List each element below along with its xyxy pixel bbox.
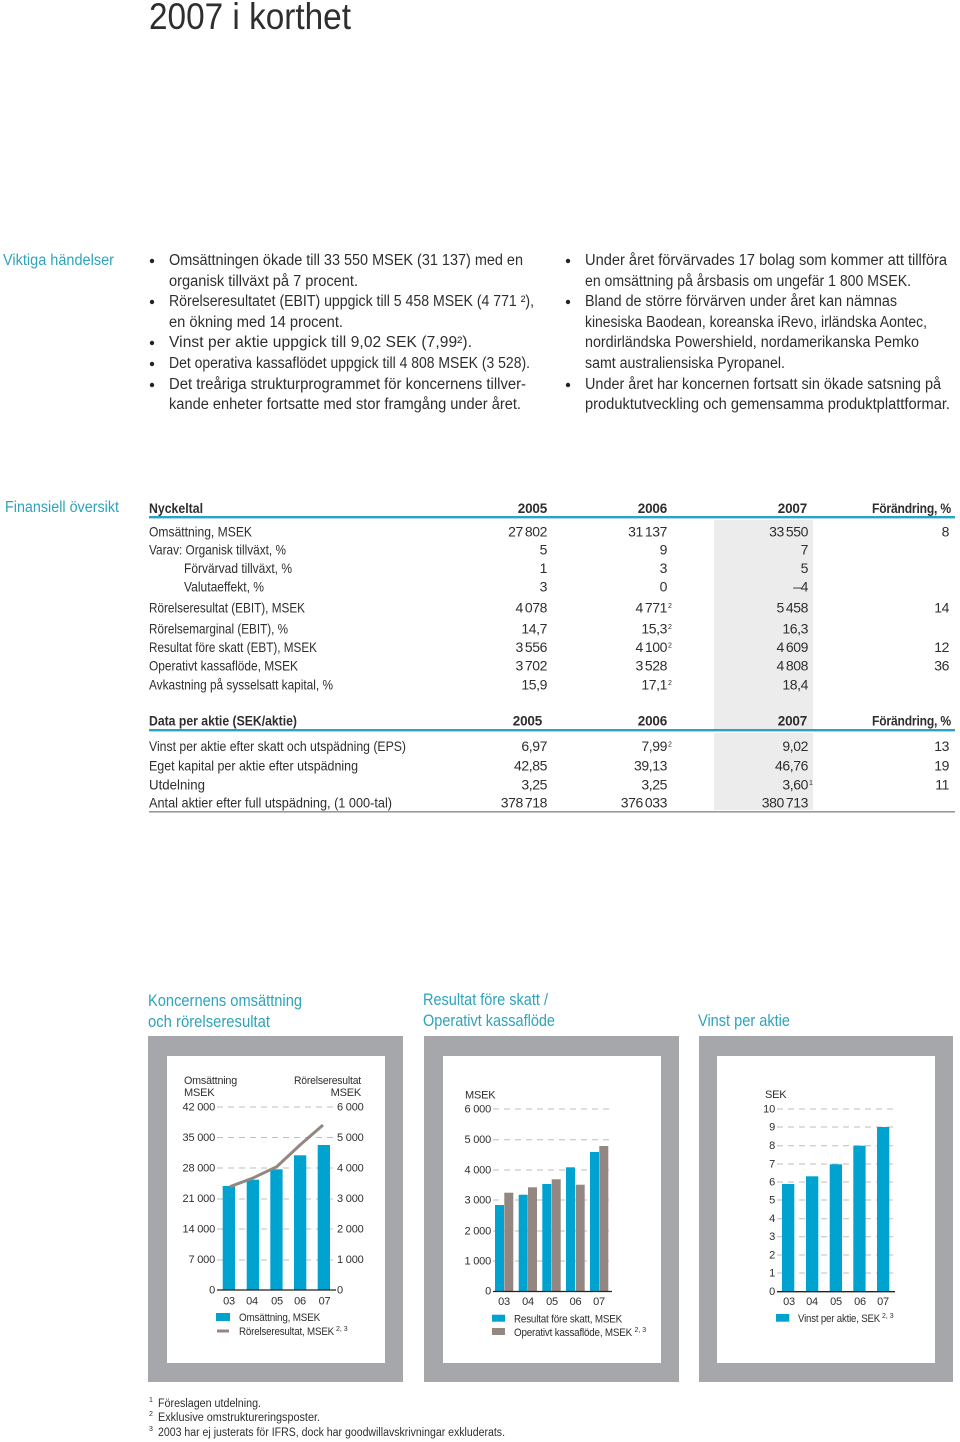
values: 2005: 14,7: [521, 620, 548, 636]
x axis labels: 05: [830, 1296, 842, 1308]
x axis labels: 07: [877, 1296, 889, 1308]
values: per share: 3,60: [782, 776, 809, 792]
left axis labels: 14 000: [183, 1224, 215, 1236]
row labels: per share data: Utdelning: [149, 776, 205, 792]
text block: events right column: nordirländska Powershield, nordamerikanska Pemko: [585, 334, 919, 351]
row labels: key figures: Varav: Organisk tillväxt, %: [149, 542, 286, 558]
section heading: Viktiga händelser: Viktiga händelser: [3, 252, 114, 269]
row labels: key figures: Valutaeffekt, %: [184, 578, 264, 594]
chart heading: Koncernens omsättning och rörelseresultat: [148, 992, 302, 1031]
right axis labels: 3 000: [337, 1193, 364, 1205]
values: 2007: [769, 524, 809, 692]
table header: Data per aktie: 2006: [638, 714, 668, 728]
text block: events right column: [566, 252, 950, 413]
footnotes: 2: [149, 1411, 153, 1418]
text block: events right column: Bland de större förvärven under året kan nämnas: [585, 293, 897, 310]
text block: events right column: produktutveckling och gemensamma produktplattformar.: [585, 396, 950, 413]
text block: events right column: Under året har koncernen fortsatt sin ökade satsning på: [585, 376, 941, 393]
values: 2005: 5: [540, 542, 548, 558]
table header: Data per aktie: Data per aktie (SEK/aktie): [149, 714, 297, 728]
table header: Data per aktie: 2005: [513, 714, 543, 728]
values: 2006: 4 771: [635, 600, 668, 616]
axis title: MSEK: [465, 1090, 496, 1102]
x axis labels: [783, 1296, 889, 1308]
values: 2007: 7: [801, 542, 809, 558]
values: 2006: [628, 524, 672, 692]
y axis labels: 3: [769, 1231, 775, 1243]
values: per share: 3,25: [521, 776, 548, 792]
table header: Nyckeltal: 2006: [638, 501, 668, 516]
table header: Nyckeltal: 2005: [518, 501, 548, 516]
row labels: key figures: Rörelseresultat (EBIT), MSEK: [149, 600, 306, 616]
right axis labels: 1 000: [337, 1254, 364, 1266]
row labels: key figures: Operativt kassaflöde, MSEK: [149, 658, 299, 674]
row labels: key figures: [149, 524, 333, 692]
y axis labels: 1 000: [464, 1256, 491, 1268]
left axis labels: 7 000: [188, 1254, 215, 1266]
left axis labels: 28 000: [183, 1162, 215, 1174]
table header: Nyckeltal: [149, 501, 955, 518]
text block: events left column: [150, 252, 534, 413]
y axis labels: [464, 1104, 491, 1298]
y axis labels: 1: [769, 1268, 775, 1280]
table: financial overview: [149, 501, 955, 813]
row labels: per share data: Eget kapital per aktie efter utspädning: [149, 758, 358, 774]
values: per share: 6,97: [521, 738, 548, 754]
panel: resultat och kassaflöde chart: [424, 1036, 679, 1382]
y axis labels: [763, 1104, 775, 1298]
y axis labels: 6 000: [464, 1104, 491, 1116]
values: 2006: 3 528: [635, 658, 668, 674]
row labels: per share data: Vinst per aktie efter skatt och utspädning (EPS): [149, 738, 406, 754]
x axis labels: 07: [319, 1296, 330, 1308]
left axis labels: 0: [209, 1284, 215, 1296]
footnotes: [149, 1397, 505, 1439]
y axis labels: 10: [763, 1104, 775, 1116]
x axis labels: 06: [294, 1296, 306, 1308]
row labels: key figures: Resultat före skatt (EBT), MSEK: [149, 639, 318, 655]
values: per share: 2: [668, 742, 672, 748]
values: 2007: 5 458: [776, 600, 809, 616]
values: 2006: 2: [668, 603, 672, 610]
legend: Omsättning, MSEK: [239, 1312, 321, 1324]
panel: omsättning chart: [148, 1036, 403, 1382]
values: 2007: 18,4: [782, 676, 809, 692]
values: per share: 1: [809, 780, 813, 787]
panel: vinst per aktie chart: [699, 1036, 953, 1382]
table header: Nyckeltal: 2007: [778, 501, 807, 516]
line: rörelseresultat: [230, 1125, 323, 1187]
values: 2005: 27 802: [508, 524, 548, 540]
values: per share: 13: [934, 738, 950, 754]
table header: Nyckeltal: Förändring, %: [872, 501, 951, 516]
footnotes: 1: [149, 1397, 153, 1404]
values: 2005: 3 556: [515, 639, 548, 655]
legend: Resultat före skatt, MSEK: [514, 1314, 623, 1326]
right axis labels: 2 000: [337, 1224, 364, 1236]
values: per share: 376 033: [621, 794, 668, 810]
legend: [216, 1312, 348, 1338]
footnotes: Exklusive omstruktureringsposter.: [158, 1412, 320, 1424]
right axis labels: [337, 1102, 364, 1296]
table header: Data per aktie: [149, 714, 955, 731]
values: per share: 9,02: [782, 738, 809, 754]
values: 2006: 2: [668, 642, 672, 650]
values: 2005: [508, 524, 548, 692]
legend: 2, 3: [336, 1326, 348, 1333]
text block: events right column: en omsättning på årsbasis om ungefär 1 800 MSEK.: [585, 273, 911, 290]
text block: events left column: Omsättningen ökade till 33 550 MSEK (31 137) med en: [169, 252, 523, 269]
x axis labels: 03: [783, 1296, 795, 1308]
row labels: key figures: Förvärvad tillväxt, %: [184, 560, 292, 576]
right axis labels: 6 000: [337, 1102, 364, 1114]
x axis labels: [223, 1296, 330, 1308]
x axis labels: 03: [498, 1296, 510, 1308]
y axis labels: 6: [769, 1176, 775, 1188]
row labels: key figures: Rörelsemarginal (EBIT), %: [149, 620, 288, 636]
axis titles: [184, 1075, 362, 1099]
values: change percent: [934, 524, 950, 674]
left axis labels: 21 000: [183, 1193, 215, 1205]
values: per share: 380 713: [762, 794, 809, 810]
x axis labels: 04: [522, 1296, 534, 1308]
values: per share: 39,13: [634, 758, 668, 774]
values: per share: 19: [934, 758, 950, 774]
bars: omsättning: [223, 1145, 330, 1290]
values: 2006: 15,3: [641, 620, 668, 636]
values: per share: 3,25: [641, 776, 668, 792]
legend: [492, 1314, 646, 1339]
text block: events left column: kande enheter fortsatte med stor framgång under året.: [169, 396, 521, 413]
left axis labels: 42 000: [183, 1102, 215, 1114]
left axis labels: [183, 1102, 215, 1296]
section heading: Finansiell översikt: Finansiell översikt: [5, 499, 120, 516]
text block: events left column: Rörelseresultatet (EBIT) uppgick till 5 458 MSEK (4 771 ²),: [169, 293, 534, 310]
footnotes: 3: [149, 1426, 153, 1433]
y axis labels: 4 000: [464, 1164, 491, 1176]
legend: Operativt kassaflöde, MSEK: [514, 1327, 633, 1339]
values: 2005: 4 078: [515, 600, 548, 616]
values: change percent: 36: [934, 658, 950, 674]
text block: events right column: kinesiska Baodean, koreanska iRevo, irländska Aontec,: [585, 314, 927, 331]
x axis labels: [498, 1296, 605, 1308]
x axis labels: 07: [593, 1296, 605, 1308]
text block: events left column: en ökning med 14 procent.: [169, 314, 343, 331]
values: 2005: 15,9: [521, 676, 548, 692]
values: 2006: 0: [660, 578, 668, 594]
x axis labels: 06: [570, 1296, 581, 1308]
row labels: key figures: Omsättning, MSEK: [149, 524, 253, 540]
values: 2006: 4 100: [635, 639, 668, 655]
text block: events left column: Det operativa kassaflödet uppgick till 4 808 MSEK (3 528).: [169, 355, 530, 372]
footnotes: Föreslagen utdelning.: [158, 1398, 261, 1410]
values: 2007: 4 609: [776, 639, 809, 655]
values: 2007: 5: [801, 560, 809, 576]
axis titles: Rörelseresultat: [294, 1075, 361, 1087]
values: 2007: 16,3: [782, 620, 809, 636]
legend: Vinst per aktie, SEK: [798, 1313, 881, 1325]
right axis labels: 5 000: [337, 1132, 364, 1144]
table header: Nyckeltal: Nyckeltal: [149, 501, 203, 516]
axis title: SEK: [765, 1089, 787, 1101]
x axis labels: 03: [223, 1296, 235, 1308]
bars: resultat före skatt: [495, 1152, 599, 1291]
values: 2006: 2: [668, 680, 672, 687]
table header: Data per aktie: 2007: [778, 714, 807, 728]
row labels: per share data: Antal aktier efter full utspädning, (1 000-tal): [149, 794, 392, 810]
chart heading: Resultat före skatt / Operativt kassaflöde: Resultat före skatt /: [423, 991, 548, 1009]
bars: operativt kassaflöde: [504, 1146, 608, 1291]
x axis labels: 04: [806, 1296, 818, 1308]
chart heading: Resultat före skatt / Operativt kassaflöde: Operativt kassaflöde: [423, 1012, 555, 1030]
values: 2007: –4: [793, 578, 809, 594]
grid lines: [493, 1109, 612, 1261]
x axis labels: 05: [271, 1296, 283, 1308]
table header: Data per aktie: Förändring, %: [872, 714, 951, 728]
y axis labels: 5: [769, 1194, 775, 1206]
y axis labels: 2 000: [464, 1226, 491, 1238]
chart heading: Koncernens omsättning och rörelseresultat: Koncernens omsättning: [148, 992, 302, 1010]
y axis labels: 0: [769, 1286, 775, 1298]
values: 2005: 3 702: [515, 658, 548, 674]
y axis labels: 4: [769, 1213, 775, 1225]
values: 2006: 3: [660, 560, 668, 576]
values: 2007: 4 808: [776, 658, 809, 674]
values: 2006: 17,1: [641, 676, 668, 692]
values: change percent: 8: [942, 524, 950, 540]
text block: events right column: samt australiensiska Pyropanel.: [585, 355, 785, 372]
values: per share: 378 718: [501, 794, 548, 810]
y axis labels: 5 000: [464, 1134, 491, 1146]
y axis labels: 0: [485, 1286, 491, 1298]
y axis labels: 3 000: [464, 1194, 491, 1206]
values: 2005: 3: [540, 578, 548, 594]
axis titles: MSEK: [331, 1087, 362, 1099]
axis titles: Omsättning: [184, 1075, 237, 1087]
values: change percent: 14: [934, 600, 950, 616]
right axis labels: 0: [337, 1284, 343, 1296]
text block: events right column: Under året förvärvades 17 bolag som kommer att tillföra: [585, 252, 947, 269]
text block: events left column: Vinst per aktie uppgick till 9,02 SEK (7,99²).: [169, 334, 472, 351]
y axis labels: 8: [769, 1140, 775, 1152]
bars: vinst per aktie: [782, 1127, 889, 1292]
chart heading: Vinst per aktie: Vinst per aktie: [698, 1012, 790, 1030]
text block: events left column: Det treåriga strukturprogrammet för koncernens tillver-: [169, 376, 526, 393]
x axis labels: 04: [246, 1296, 258, 1308]
right axis labels: 4 000: [337, 1162, 364, 1174]
row labels: key figures: Avkastning på sysselsatt kapital, %: [149, 676, 333, 692]
values: change percent: 12: [934, 639, 950, 655]
x axis labels: 05: [546, 1296, 558, 1308]
values: 2007: 33 550: [769, 524, 809, 540]
values: per share: 11: [935, 776, 950, 792]
values: per share: 7,99: [641, 738, 668, 754]
footnotes: 2003 har ej justerats för IFRS, dock har goodwillavskrivningar exkluderats.: [158, 1427, 505, 1439]
row labels: per share data: [149, 738, 406, 810]
text block: events left column: organisk tillväxt på 7 procent.: [169, 273, 358, 290]
y axis labels: 7: [769, 1158, 775, 1170]
legend: Rörelseresultat, MSEK: [239, 1326, 335, 1338]
y axis labels: 2: [769, 1250, 775, 1262]
chart heading: Koncernens omsättning och rörelseresultat: och rörelseresultat: [148, 1013, 270, 1031]
values: per share: 42,85: [514, 758, 548, 774]
grid lines: [217, 1107, 336, 1260]
chart heading: Resultat före skatt / Operativt kassaflöde: [423, 991, 555, 1030]
x axis labels: 06: [854, 1296, 866, 1308]
values: per share: 46,76: [775, 758, 809, 774]
legend: 2, 3: [634, 1327, 646, 1334]
left axis labels: 35 000: [183, 1132, 215, 1144]
values: per share: [501, 738, 950, 810]
values: 2005: 1: [540, 560, 548, 576]
values: 2006: 31 137: [628, 524, 668, 540]
values: 2006: 2: [668, 624, 672, 631]
values: 2006: 9: [660, 542, 668, 558]
legend: 2, 3: [882, 1313, 894, 1320]
y axis labels: 9: [769, 1122, 775, 1134]
axis titles: MSEK: [184, 1087, 215, 1099]
grid lines: [777, 1109, 895, 1273]
